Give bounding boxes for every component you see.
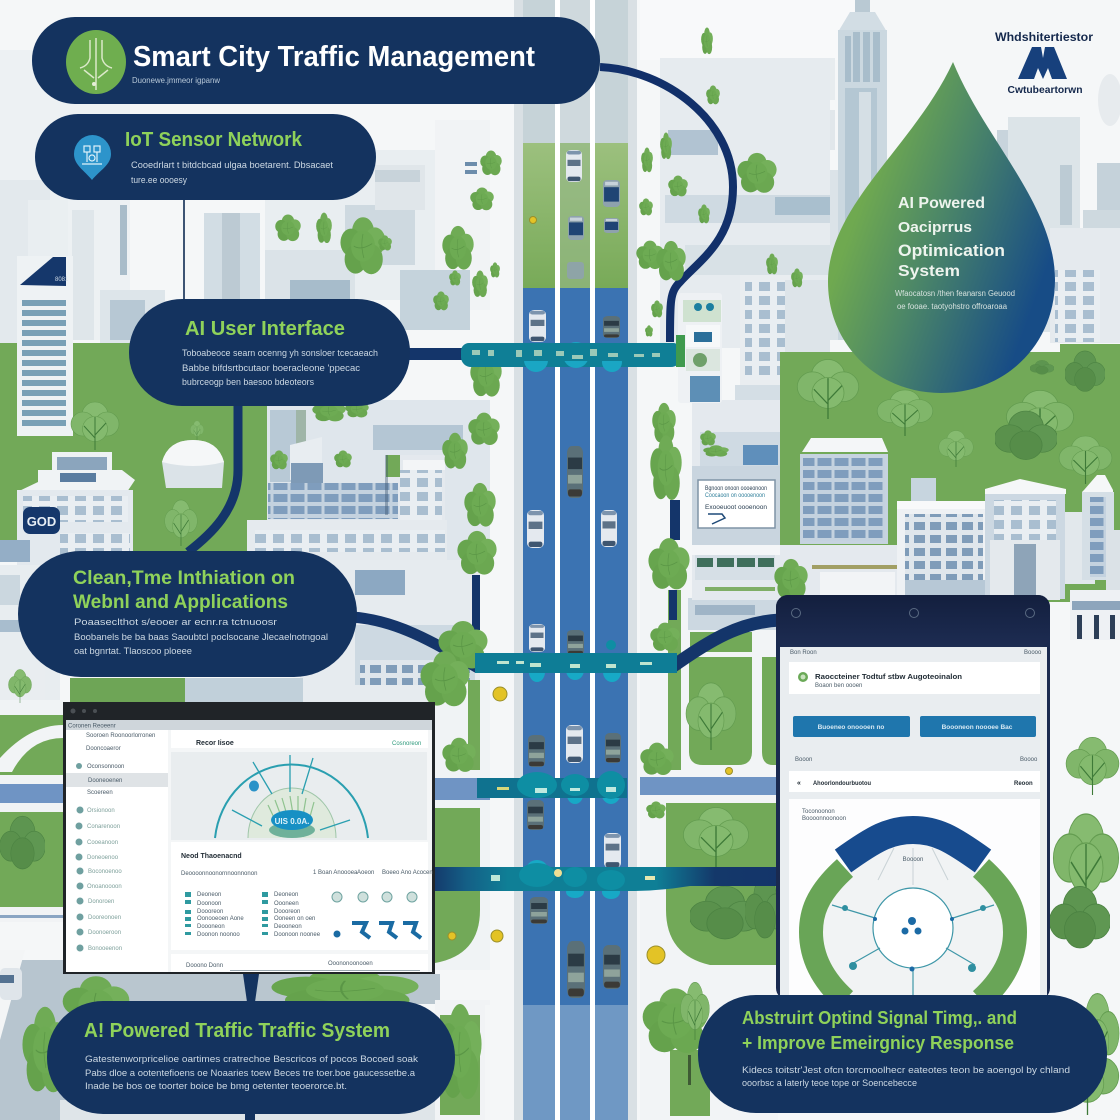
navy connector: IoT drop line	[183, 198, 185, 303]
data panel: Deooneon	[274, 924, 302, 930]
list row: Reoon	[1014, 781, 1033, 787]
logo: Cwtubeartorwn	[1008, 85, 1082, 96]
phone mockup: Boooo	[1020, 757, 1038, 763]
app header card	[789, 662, 1040, 694]
body text: ooorbsc a Iaterly teoe tope or Soencebecce	[742, 1078, 917, 1088]
heading: Clean,Tme Inthiation on	[73, 568, 295, 589]
skyline: top right towers	[640, 0, 1120, 343]
small yellow sensors	[448, 216, 732, 964]
tower with navy corner	[17, 256, 73, 436]
action buttons	[793, 716, 1036, 737]
pill: clean time initiation	[18, 551, 357, 677]
body text: Babbe bifdsrtbcutaor boeracleone 'ppecac	[182, 363, 361, 373]
body text: Inade be bos oe toorter boice be bmg oetenter teoerorce.bt.	[85, 1081, 347, 1091]
title text: Smart City Traffic Management	[133, 41, 535, 73]
navy connector: band to phone	[672, 620, 780, 667]
heading	[742, 1008, 1017, 1053]
cars on road	[527, 150, 621, 998]
sidebar: Bonooeenon	[88, 946, 122, 952]
sidebar: Donoroen	[88, 899, 114, 905]
lawn and streets: between browser and road	[435, 680, 515, 1120]
right side buildings row	[780, 438, 1120, 640]
pill: AI user interface	[129, 299, 410, 406]
building: narrow tower	[1082, 475, 1114, 580]
GOD tag: GOD	[27, 514, 56, 529]
body text: bubrceogp ben baesoo bdeoteors	[182, 377, 314, 387]
data panel: Aoeon	[357, 870, 374, 876]
data panel: Boeeo Ano Acocen	[382, 870, 433, 876]
lawn and streets: left	[0, 700, 500, 1120]
body text: Gatestenworpricelioe oartimes cratrechoe Bescricos of pocos Bocoed soak	[85, 1054, 419, 1064]
sidebar: Onoanoooon	[87, 884, 122, 890]
subtitle: Duonewe.jmmeor igpanw	[132, 75, 221, 85]
sidebar: Sooroen Roonoorlorronen	[86, 733, 155, 739]
pill: IoT sensor network	[35, 114, 376, 200]
browser dashboard window: Coronen Reoeenr	[68, 724, 116, 730]
heading: IoT Sensor Network	[125, 129, 303, 151]
sidebar: Doonoeroon	[88, 930, 121, 936]
radial gauge chart	[171, 752, 427, 840]
centre left buildings	[247, 400, 492, 570]
lawn: upper right	[780, 352, 1120, 602]
sidebar	[66, 730, 168, 972]
right of road civic block	[692, 400, 780, 600]
body text	[131, 160, 334, 185]
connector: browser to AI system pill	[243, 974, 259, 1002]
data panel: Doooreon	[197, 909, 223, 915]
tower with navy corner: 8081	[55, 277, 69, 283]
sidebar: Scoereen	[87, 790, 113, 796]
billboard: Exooeuoot oooenoon	[705, 505, 767, 511]
lower panel	[171, 954, 428, 972]
heading: A! Powered Traffic Traffic System	[84, 1020, 390, 1042]
data panel	[171, 842, 433, 950]
navy connector: clean time to band	[352, 617, 478, 668]
logo mark	[1018, 47, 1067, 79]
body text: Kidecs toitstr'Jest ofcn torcmoolhecr eateotes teon be aoengol by chland	[742, 1065, 1070, 1075]
list row: Ahoorlondourbuotou	[813, 781, 871, 787]
sidebar: Dooneoenen	[88, 778, 122, 784]
pill: AI powered traffic system	[47, 1001, 455, 1114]
pill: title	[32, 17, 600, 104]
body text: oat bgnrtat. Tlaoscoo ploeee	[74, 646, 192, 656]
billboard: Bgnoon onoon oooeonoon	[705, 486, 767, 492]
browser dashboard window	[63, 702, 435, 974]
data panel: Doooreon	[274, 909, 300, 915]
data panel: Oonooeoen Aone	[197, 916, 244, 922]
app header card: Raoccteiner Todtuf stbw Augoteoinalon	[815, 674, 962, 681]
data panel: Doooneon	[197, 924, 225, 930]
navy and teal sensor band 4	[432, 860, 777, 899]
icon: sensor pin	[74, 135, 111, 180]
sidebar: Orsionoon	[87, 808, 115, 814]
body text: Wfaocatosn /then feanarsn Geuood	[895, 289, 1015, 298]
billboard: Coocaoon on ooooenoon	[705, 493, 765, 499]
navy connector: title pill to right	[600, 67, 733, 342]
body text: Cooedrlart t bitdcbcad ulgaa boetarent. Dbsacaet	[131, 160, 334, 170]
data panel: Neod Thaoenacnd	[181, 853, 242, 860]
radial gauge chart: UIS 0.0A.	[275, 817, 309, 826]
body text	[742, 1065, 1070, 1088]
lower panel: Ooononoonooen	[328, 961, 373, 967]
heading: Optimication	[898, 241, 1005, 260]
heading	[73, 568, 295, 613]
body text: Pabs dloe a ootentefioens oe Noaaries toew Beces tre toer.boe gaucessetbe.a	[85, 1068, 415, 1078]
icon: road junction	[66, 30, 126, 94]
ring diagram	[789, 799, 1040, 1020]
body text	[85, 1054, 419, 1091]
data panel: Oooneen	[274, 901, 299, 907]
body text: oe fooae. taotyohstro offroaroaa	[897, 302, 1008, 311]
teal sensor band 3	[477, 771, 627, 804]
data panel: Deoooonnoonornnoonnonon	[181, 871, 257, 877]
logo: Whdshitertiestor	[995, 32, 1094, 44]
heading: AI User Interface	[185, 318, 345, 340]
teal sensor band 1	[461, 342, 681, 372]
data panel: Doonon noonoo	[197, 932, 240, 938]
list row	[789, 771, 1040, 792]
building with GOD tag	[0, 452, 135, 565]
navy connector: user interface to band	[405, 348, 465, 360]
data panel: Doonoon	[197, 901, 221, 907]
ring diagram: Boooon	[903, 857, 923, 863]
sidebar: Doneoenoo	[87, 855, 119, 861]
body text: ture.ee oooesy	[131, 175, 187, 185]
sidebar: Dooncoaeror	[86, 746, 121, 752]
ring diagram: Boooonnoonoon	[802, 816, 846, 822]
body text: Boobanels be ba baas Saoubtcl poclsocane Jlecaelnotngoal	[74, 632, 328, 642]
teal sensor band 2	[475, 640, 677, 682]
body text: Toboabeoce searn ocenng yh sonsloer tcecaeach	[182, 348, 378, 358]
data panel: Deoneon	[274, 892, 298, 898]
list row: «	[797, 780, 801, 787]
data panel: 1 Boan Anoooea	[313, 870, 358, 876]
navy trunk lines	[472, 500, 680, 630]
central road	[490, 0, 640, 1120]
header strip	[171, 730, 428, 748]
data panel: Deoneon	[197, 892, 221, 898]
ring diagram: Toconoonon	[802, 809, 835, 815]
green control panel	[676, 293, 722, 403]
heading	[898, 195, 1005, 280]
lower panel: Dooono Donn	[186, 963, 223, 969]
heading: Abstruirt Optind Signal Timg,. and	[742, 1008, 1017, 1028]
body text	[74, 617, 328, 656]
centre right buildings	[660, 58, 830, 435]
body text: Poaaseclthot s/eooer ar ecnr.ra tctnuoosr	[74, 617, 277, 627]
data panel: Doonoon noonee	[274, 932, 321, 938]
sidebar: Boconoenoo	[88, 869, 122, 875]
heading: System	[898, 263, 960, 280]
navy connector: user interface to clean time pill	[188, 400, 238, 552]
skyline: far-left buildings	[0, 50, 260, 350]
sidebar: Oconsonnoon	[87, 764, 124, 770]
building: large office	[800, 438, 888, 544]
landmark tower	[838, 0, 887, 340]
phone mockup: Boooo	[1024, 650, 1042, 656]
action buttons: Boooneon noooee Bac	[942, 724, 1013, 731]
logo	[995, 32, 1094, 96]
green status tiles	[697, 558, 774, 567]
pill: optimal signal timing	[698, 995, 1107, 1113]
heading: Oaciprrus	[898, 219, 972, 236]
sidebar: Conarenoon	[87, 824, 120, 830]
header strip: Cosnoreon	[392, 741, 421, 747]
app header card: Boaon ben oooen	[815, 683, 862, 689]
body text	[182, 348, 378, 387]
heading: + Improve Emeirgnicy Response	[742, 1033, 1014, 1053]
heading: Webnl and Applications	[73, 592, 288, 613]
connector: below AI system pill	[245, 1112, 255, 1120]
lawn: upper left	[0, 343, 267, 553]
billboard	[698, 480, 775, 528]
body text	[895, 289, 1015, 311]
left mid lower blocks	[0, 560, 480, 706]
dome building	[162, 440, 224, 488]
building: mid block	[897, 478, 993, 602]
skyline: centre-left buildings	[265, 105, 495, 355]
data panel: Ooneen on oen	[274, 916, 315, 922]
drop panel: AI powered optimization	[828, 62, 1055, 393]
phone mockup: Booon	[795, 757, 812, 763]
header strip: Recor Iisoe	[196, 740, 234, 747]
phone mockup	[776, 595, 1050, 1020]
building: pediment block	[985, 479, 1066, 600]
heading: AI Powered	[898, 195, 985, 212]
lawn and streets: between road and phone	[636, 560, 778, 1120]
action buttons: Buoeneo onoooen no	[818, 724, 884, 731]
sidebar: Cooeanoon	[87, 840, 118, 846]
sidebar: Dooreonoen	[88, 915, 121, 921]
phone mockup: Bon Roon	[790, 650, 817, 656]
